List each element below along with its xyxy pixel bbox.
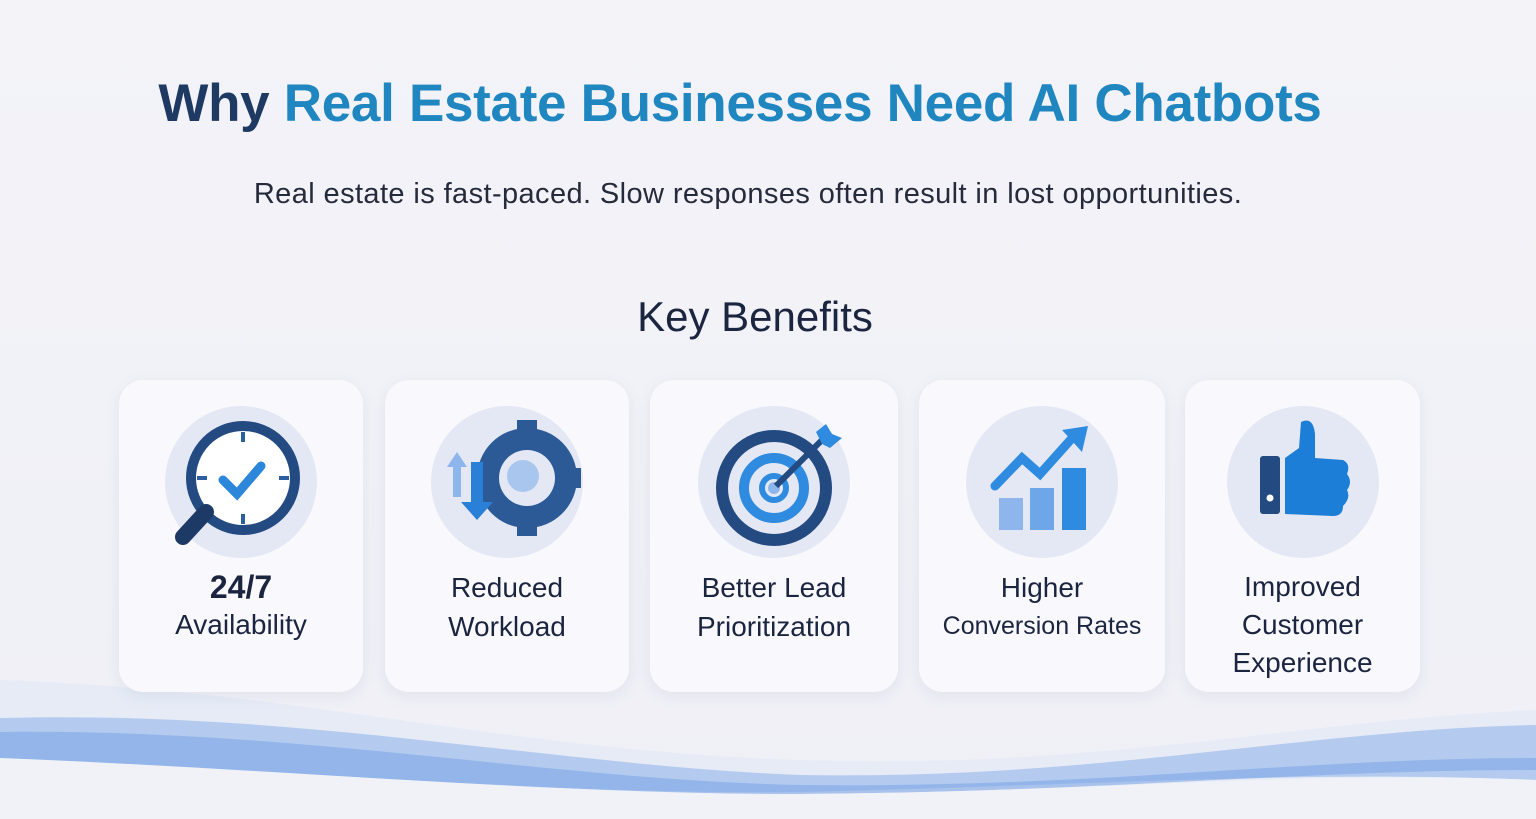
card: better lead prioritization xyxy=(650,380,898,692)
heading: key benefits: Key Benefits xyxy=(637,293,873,340)
card: 24/7 availability: Availability xyxy=(175,609,307,640)
card: reduced workload xyxy=(385,380,629,692)
icon: gear arrows xyxy=(431,406,583,558)
icon: clock magnifier xyxy=(165,406,317,558)
card: reduced workload: Workload xyxy=(448,611,566,642)
card: 24/7 availability: 24/7 xyxy=(210,569,272,605)
icon: target xyxy=(698,406,850,558)
card: better lead prioritization: Prioritization xyxy=(697,611,851,642)
card: higher conversion rates xyxy=(919,380,1165,692)
card: higher conversion rates: Conversion Rates xyxy=(943,612,1141,640)
subtitle: Real estate is fast-paced. Slow responses often result in lost opportunities. xyxy=(254,178,1242,210)
title: Why Real Estate Businesses Need AI Chatbots xyxy=(158,74,1322,133)
card: improved customer experience: Improved xyxy=(1244,571,1361,602)
background wave xyxy=(0,680,1536,794)
card: better lead prioritization: Better Lead xyxy=(702,572,846,603)
card: improved customer experience: Experience xyxy=(1232,647,1373,678)
icon: chart xyxy=(966,406,1118,558)
card: higher conversion rates: Higher xyxy=(1001,572,1083,603)
icon: thumbs up xyxy=(1227,406,1379,558)
card: improved customer experience xyxy=(1185,380,1420,692)
card: reduced workload: Reduced xyxy=(451,572,563,603)
card: improved customer experience: Customer xyxy=(1242,609,1363,640)
card: 24/7 availability xyxy=(119,380,363,692)
